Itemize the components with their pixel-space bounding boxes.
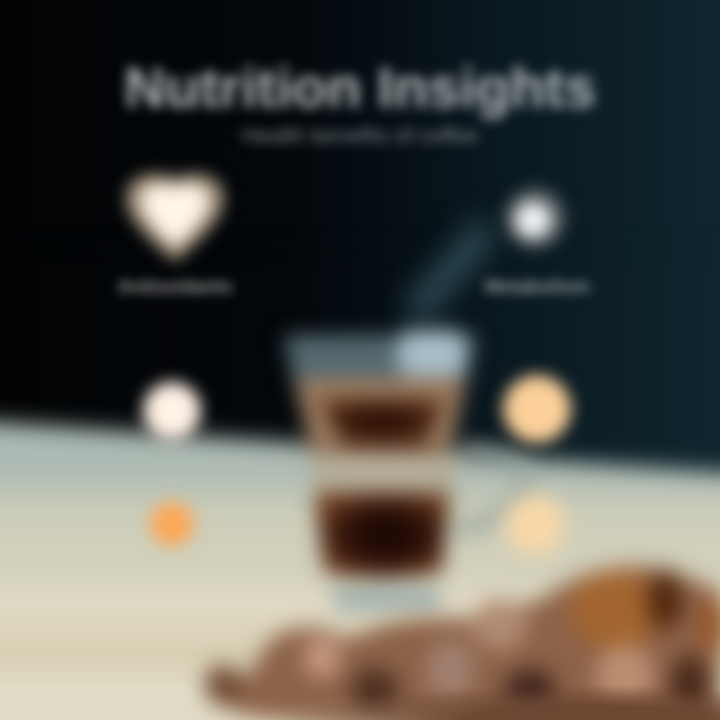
- subtitle: Health benefits of coffee: [242, 123, 478, 148]
- icon: leaf badge: [505, 188, 565, 248]
- dark wall edge above table: [0, 250, 720, 476]
- icon: pale peach circle: [505, 495, 565, 555]
- steam: [415, 225, 485, 318]
- icon: cream circle: [143, 382, 201, 440]
- icon: peach circle: [503, 375, 571, 443]
- glass of coffee: [284, 330, 525, 612]
- glass middle: [308, 458, 458, 490]
- heart halo: [126, 174, 224, 262]
- handle: [456, 452, 525, 530]
- heart core: [142, 185, 208, 246]
- lower coffee layer: [314, 492, 450, 578]
- highlight on rim: [398, 330, 466, 376]
- label: right icon: Metabolism: [485, 277, 589, 298]
- glass rim: [284, 335, 476, 385]
- upper coffee layer: [294, 378, 466, 455]
- coffee beans: [205, 566, 720, 720]
- glass base: [328, 586, 442, 612]
- table surface: [0, 380, 720, 720]
- label: left icon: Antioxidants: [117, 277, 233, 298]
- upper coffee dark core: [318, 398, 446, 446]
- title: Nutrition Insights: [124, 56, 596, 120]
- bean shadow at bottom edge: [280, 670, 720, 720]
- icon: orange circle: [150, 502, 194, 546]
- icon: heart: [126, 174, 224, 262]
